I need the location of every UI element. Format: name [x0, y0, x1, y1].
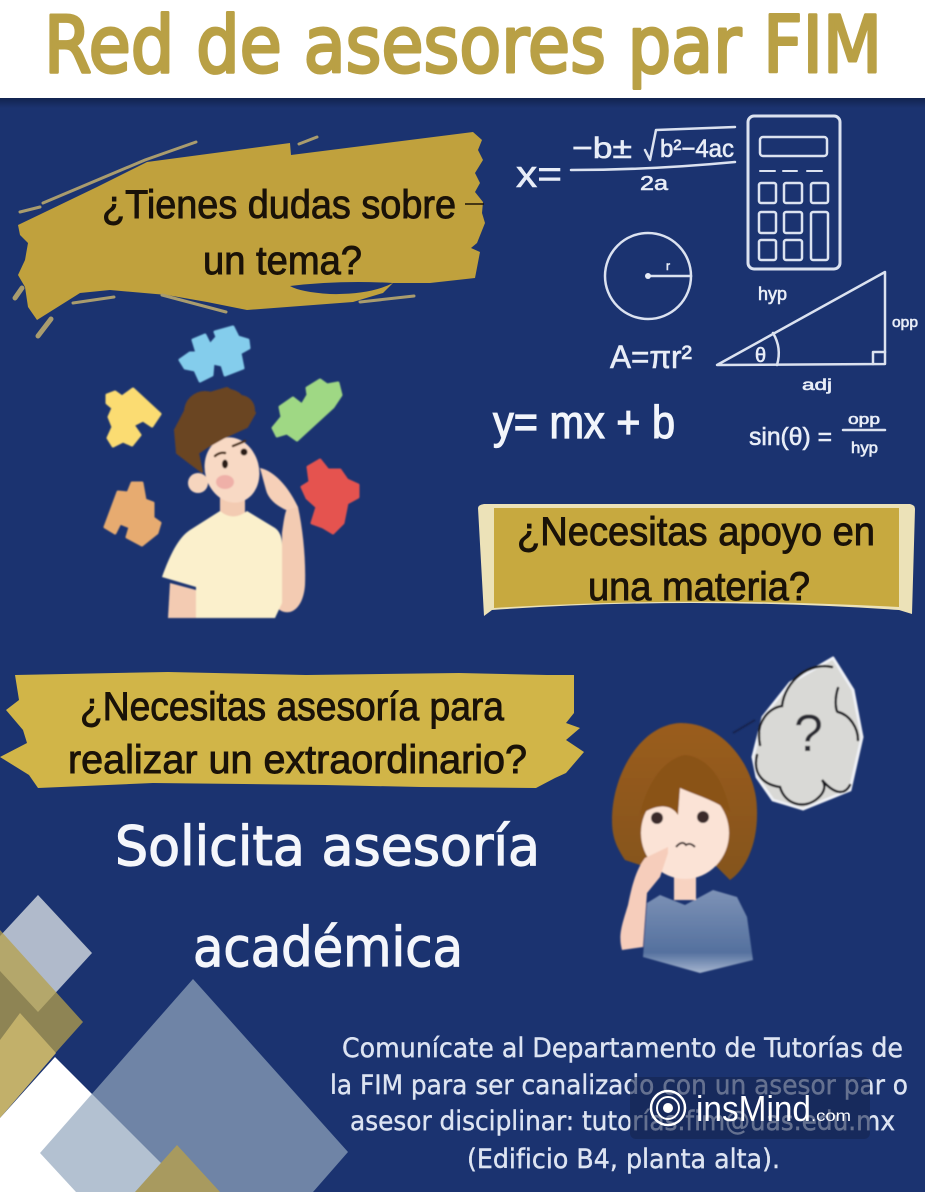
line equation: y= mx + b: [493, 396, 675, 448]
circle area diagram: A=πr²: [610, 339, 692, 375]
quadratic formula: [516, 127, 735, 196]
quadratic formula: −b±: [572, 132, 632, 165]
right triangle diagram: θ: [755, 345, 766, 367]
decorative diamonds: [0, 895, 348, 1192]
boy figure: [162, 388, 305, 618]
watermark: insMind: .com: [811, 1108, 851, 1125]
icon: calculator: [748, 116, 840, 269]
call to action: solicita asesoria academica: [115, 815, 540, 979]
icon: red puzzle piece: [302, 460, 358, 533]
circle area diagram: r: [666, 259, 670, 273]
right triangle diagram: [717, 272, 918, 394]
question: necesitas asesoria: ¿Necesitas asesoría para: [80, 685, 505, 729]
math formulas panel: [493, 116, 918, 457]
icon: orange puzzle piece: [105, 483, 160, 545]
title band: [0, 0, 925, 108]
contact text block: (Edificio B4, planta alta).: [467, 1144, 780, 1175]
question: necesitas apoyo: ¿Necesitas apoyo en: [517, 510, 875, 554]
icon: blue puzzle piece: [180, 327, 249, 381]
contact text block: Comunícate al Departamento de Tutorías de: [342, 1033, 903, 1064]
right triangle diagram: opp: [892, 314, 918, 331]
icon: green puzzle piece: [273, 380, 341, 440]
girl figure: [612, 723, 757, 973]
question: necesitas apoyo: [517, 510, 875, 609]
quadratic formula: 2a: [640, 173, 669, 195]
icon: yellow puzzle piece: [107, 389, 160, 446]
watermark: insMind: [630, 1077, 870, 1139]
quadratic formula: b²−4ac: [660, 135, 734, 163]
banner: necesitas apoyo: [478, 504, 915, 616]
question: necesitas asesoria: realizar un extraordinario?: [68, 738, 527, 782]
sine formula: opp: [848, 411, 880, 428]
banner: tienes dudas: [15, 132, 485, 336]
illustration: boy with puzzle pieces: [105, 327, 358, 618]
sine formula: sin(θ) =: [749, 423, 832, 451]
watermark: insMind: insMind: [696, 1088, 811, 1129]
icon: insMind logo: [651, 1091, 685, 1125]
call to action: solicita asesoria academica: académica: [193, 916, 463, 979]
question: tienes dudas: un tema?: [203, 239, 362, 283]
circle area diagram: [605, 233, 692, 375]
quadratic formula: x=: [516, 154, 562, 196]
contact text block: [330, 1033, 908, 1175]
call to action: solicita asesoria academica: Solicita asesoría: [115, 815, 540, 878]
question: necesitas asesoria: [68, 685, 527, 782]
question: necesitas apoyo: una materia?: [588, 565, 810, 609]
illustration: thinking girl with cloud: [612, 658, 862, 973]
question: tienes dudas: [102, 183, 456, 283]
thought cloud: [733, 658, 862, 809]
question: tienes dudas: ¿Tienes dudas sobre: [102, 183, 456, 227]
sine formula: hyp: [851, 440, 878, 457]
right triangle diagram: adj: [802, 377, 832, 394]
sine formula: [749, 411, 885, 457]
banner: necesitas asesoria: [0, 672, 584, 788]
thought cloud: ?: [794, 705, 823, 763]
right triangle diagram: hyp: [758, 284, 787, 304]
